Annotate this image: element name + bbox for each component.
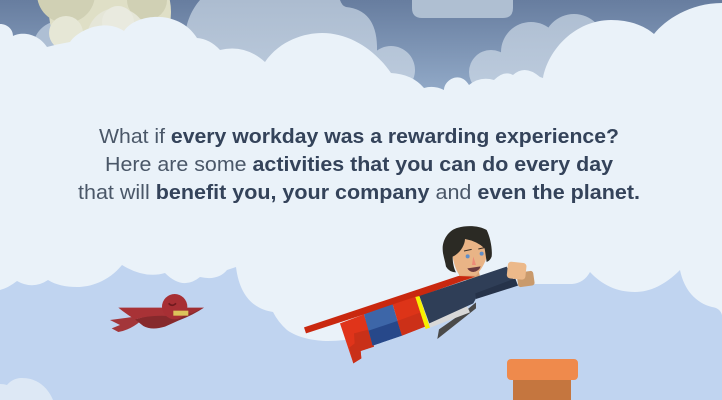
eyes bbox=[466, 254, 470, 258]
mouth bbox=[467, 266, 481, 272]
bird head bbox=[162, 294, 187, 319]
face bbox=[453, 238, 487, 276]
cape strip bbox=[304, 276, 475, 333]
chimney bbox=[507, 359, 578, 400]
jacket bbox=[419, 267, 517, 323]
moon bbox=[37, 0, 171, 73]
bird upper wing bbox=[118, 308, 168, 319]
neck bbox=[458, 268, 481, 280]
intro text bbox=[78, 126, 640, 204]
bird body bbox=[135, 308, 204, 329]
intro text: What if every workday was a rewarding experience? bbox=[99, 126, 619, 148]
back cloud: centre bbox=[185, 0, 415, 100]
back cloud behind moon bbox=[33, 21, 87, 75]
bird tail bbox=[110, 317, 140, 332]
intro text: that will benefit you, your company and even the planet. bbox=[78, 182, 640, 204]
suit panel: right red bbox=[393, 297, 425, 336]
bird beak bbox=[173, 311, 188, 316]
bird eye bbox=[169, 303, 176, 305]
small cloud bottom left bbox=[0, 378, 53, 400]
background: lower sky bbox=[0, 95, 722, 400]
bird bbox=[110, 294, 204, 332]
bird far wing bbox=[185, 308, 204, 313]
yellow belt bbox=[415, 296, 430, 329]
pill cloud bbox=[412, 0, 513, 18]
hero flying bbox=[304, 226, 535, 363]
shirt bbox=[429, 306, 470, 328]
intro text: Here are some activities that you can do every day bbox=[105, 154, 614, 176]
nose bbox=[472, 257, 476, 265]
eyebrows bbox=[464, 248, 485, 251]
suit panel: left red bbox=[340, 314, 374, 363]
suit panel: blue bbox=[364, 304, 402, 346]
back cloud: right bbox=[469, 14, 605, 102]
tie bbox=[437, 302, 476, 339]
background: upper sky bbox=[0, 0, 722, 95]
hair bbox=[443, 226, 492, 272]
fist bbox=[516, 271, 535, 287]
